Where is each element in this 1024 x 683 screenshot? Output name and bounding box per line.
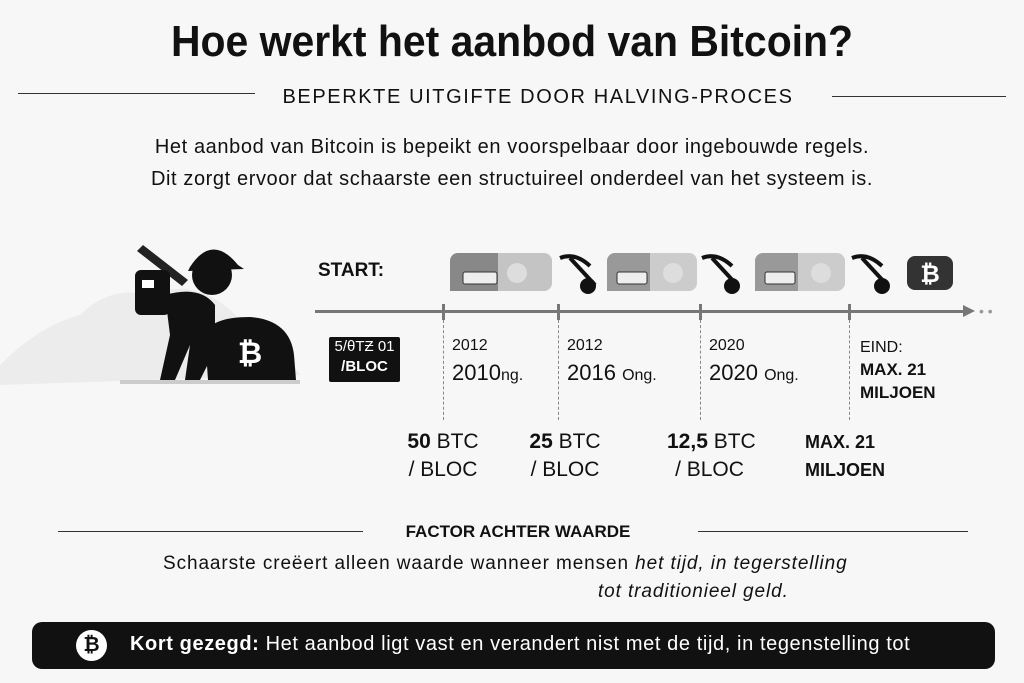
section heading: factor achter waarde: FACTOR ACHTER WAARDE [406,522,630,541]
icon: bitcoin coin: ₿ [83,634,100,656]
year labels [452,337,936,402]
factor text: Schaarste creëert alleen waarde wanneer mensen het tijd, in tegerstelling [163,553,848,574]
icon: bitcoin coin [76,630,107,661]
timeline axis: • • [979,303,993,319]
year labels: 2012 [567,337,603,354]
label: start reward box: /BLOC [341,358,388,375]
reward amounts: 50 BTC [407,430,479,453]
subtitle with rules: BEPERKTE UITGIFTE DOOR HALVING-PROCES [282,86,794,108]
start label: START: [318,260,384,281]
illustration: miner with bitcoin bag: ₿ [238,337,262,370]
year labels: MAX. 21 [860,360,926,379]
reward amounts: MILJOEN [805,460,885,480]
reward amounts: / BLOC [675,458,744,481]
reward amounts: 25 BTC [529,430,601,453]
reward amounts: / BLOC [409,458,477,481]
factor text: tot traditionieel geld. [598,581,789,602]
dashed drop lines [443,320,850,420]
intro text [151,136,873,190]
intro text: Dit zorgt ervoor dat schaarste een structuireel onderdeel van het systeem is. [151,168,873,190]
year labels: 2020 [709,337,745,354]
title: Hoe werkt het aanbod van Bitcoin? [171,17,853,66]
factor text [163,553,848,602]
bottom summary bar [32,622,995,669]
label: start reward box: 5/θTƵ 01 [334,338,395,355]
bottom summary bar: Kort gezegd: Het aanbod ligt vast en verandert nist met de tijd, in tegenstelling tot [130,633,910,655]
year labels: 2016 Ong. [567,360,657,385]
timeline icons: ₿ [920,261,940,288]
label: start reward box [329,337,400,382]
year labels: EIND: [860,339,903,356]
intro text: Het aanbod van Bitcoin is bepeikt en voorspelbaar door ingebouwde regels. [155,136,869,158]
reward amounts: MAX. 21 [805,432,875,452]
year labels: 2012 [452,337,488,354]
timeline axis [315,303,993,320]
illustration: miner with bitcoin bag [0,245,300,385]
year labels: MILJOEN [860,383,936,402]
reward amounts: / BLOC [531,458,599,481]
timeline icons [450,253,953,294]
year labels: 2020 Ong. [709,360,799,385]
reward amounts [407,430,885,481]
year labels: 2010ng. [452,360,523,385]
reward amounts: 12,5 BTC [667,430,756,453]
